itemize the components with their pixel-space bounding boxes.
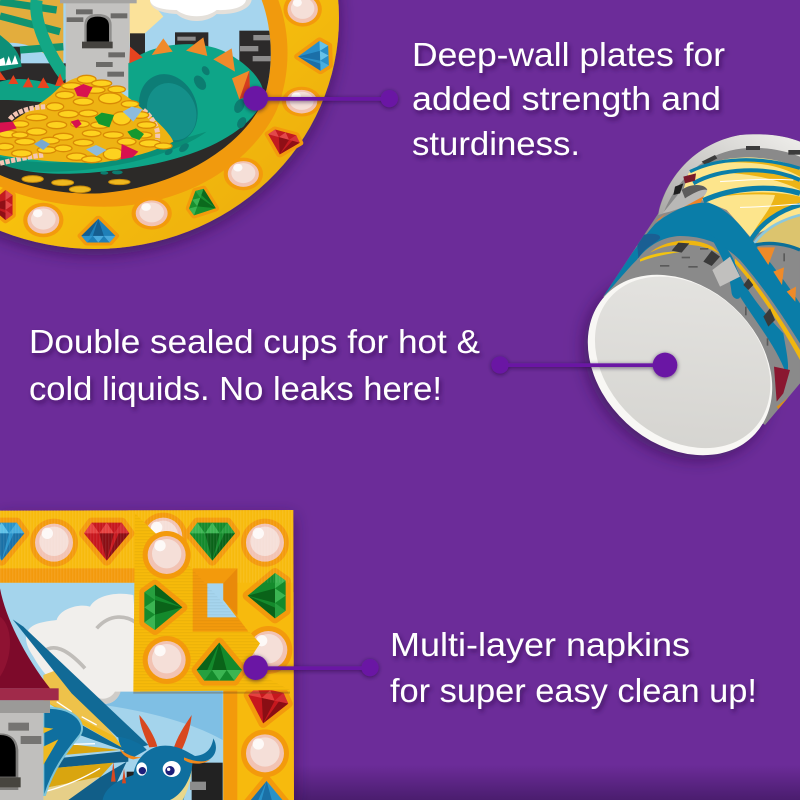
napkin caption — [390, 626, 757, 709]
rib texture — [0, 510, 293, 583]
back spikes — [0, 72, 65, 88]
tower — [0, 700, 50, 713]
connector: cup — [491, 353, 677, 377]
bricks — [672, 243, 775, 327]
plate — [0, 0, 398, 249]
small wing at head — [118, 737, 147, 757]
cloud — [150, 0, 252, 21]
dragon claw — [714, 242, 788, 370]
background bottom shade — [0, 765, 800, 800]
connector: napkin — [243, 655, 379, 680]
cloud — [26, 594, 140, 704]
eyes — [136, 761, 181, 777]
orange border stripes — [0, 568, 237, 800]
plate caption — [412, 36, 725, 162]
dragon arm — [43, 708, 82, 795]
pearl string — [0, 107, 158, 163]
orange spikes — [757, 247, 796, 302]
dragon and castle scene — [0, 588, 223, 800]
green dragon body — [0, 44, 264, 174]
napkin base — [0, 510, 294, 800]
plate caption: sturdiness. — [412, 125, 580, 162]
plate caption: added strength and — [412, 80, 721, 117]
plate rim — [0, 0, 339, 249]
pile gems — [0, 84, 144, 159]
tower — [66, 0, 130, 90]
wing top blue edge — [13, 619, 148, 748]
yellow stripes — [650, 240, 720, 254]
connector: plate — [243, 86, 398, 111]
horns — [139, 715, 192, 752]
coin pile — [0, 77, 173, 163]
napkin sky — [0, 583, 223, 800]
sun rays and wing — [128, 0, 163, 47]
napkin caption: Multi-layer napkins — [390, 626, 690, 663]
cup caption: cold liquids. No leaks here! — [29, 370, 442, 407]
roof — [0, 588, 50, 688]
top row gems and pearls — [0, 513, 292, 674]
orange inner band — [0, 0, 288, 207]
sky — [9, 0, 271, 98]
cup caption: Double sealed cups for hot & — [29, 323, 480, 360]
battlements — [0, 31, 274, 97]
cup shadow — [551, 238, 800, 492]
ground — [0, 100, 258, 194]
plate caption: Deep-wall plates for — [412, 36, 725, 73]
wing highlights — [720, 178, 800, 208]
individual coins — [0, 75, 172, 163]
snout spikes — [111, 762, 126, 783]
loose coins — [22, 176, 130, 193]
dragon thigh — [139, 74, 198, 142]
wing lower section — [755, 215, 800, 248]
white rim lip — [658, 134, 800, 215]
spikes on body — [129, 37, 250, 99]
wing gold sections — [43, 700, 128, 800]
cup caption — [29, 323, 480, 407]
blue dragon — [603, 203, 800, 343]
plate picture — [0, 0, 277, 200]
wing gold bands — [722, 162, 800, 234]
rim dashes — [702, 146, 800, 165]
wing struts — [690, 160, 800, 242]
napkin — [0, 510, 379, 800]
rim decorations: pearls and gems — [0, 0, 329, 242]
wing pale yellow — [43, 670, 115, 737]
green dragon head — [0, 35, 22, 72]
cup base rim — [551, 238, 800, 492]
wing panel — [683, 157, 800, 237]
folded flap — [133, 513, 290, 692]
right column gems and pearls — [241, 686, 290, 800]
left dragon wing — [0, 0, 64, 64]
napkin caption: for super easy clean up! — [390, 672, 757, 709]
black battlement — [192, 763, 223, 800]
cup — [491, 130, 800, 492]
cup body — [604, 134, 800, 425]
cup base — [560, 242, 800, 483]
flap shadow — [133, 692, 290, 694]
wing highlights — [45, 702, 100, 792]
small tower — [663, 185, 707, 213]
blue dragon head — [103, 738, 216, 800]
